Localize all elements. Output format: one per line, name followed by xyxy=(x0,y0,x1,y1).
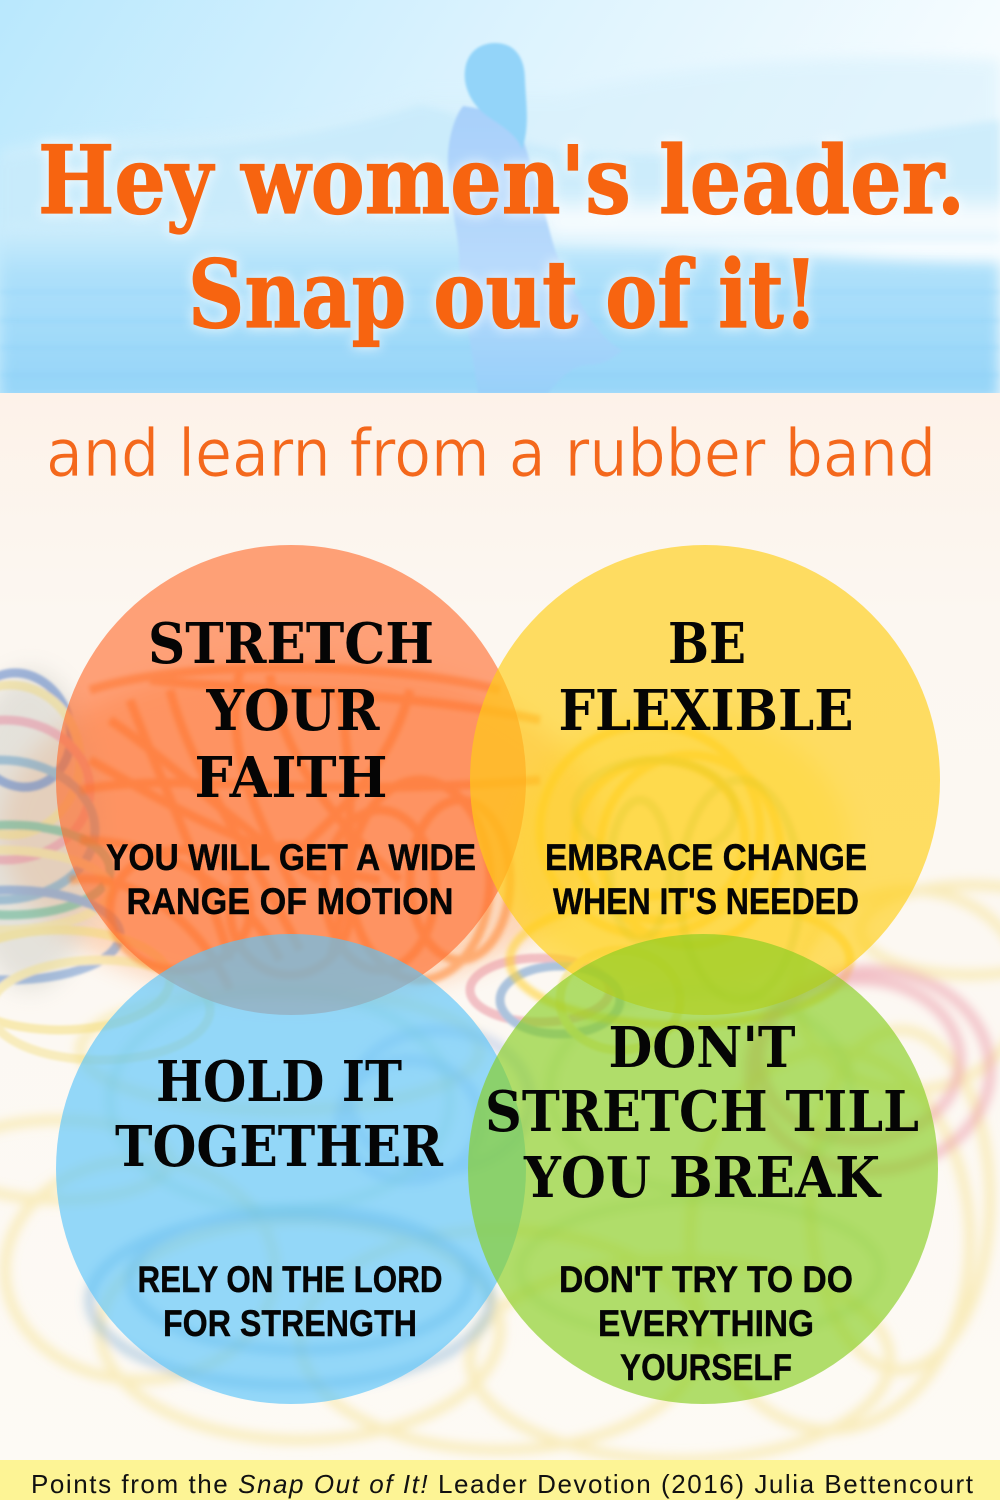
circle: stretch your faith xyxy=(56,545,526,1015)
circle: don't stretch till you break: DON'T xyxy=(608,1015,796,1081)
circle: don't stretch till you break: STRETCH TILL xyxy=(485,1079,919,1145)
subtitle: and learn from a rubber band xyxy=(46,415,936,492)
circle: stretch your faith: FAITH xyxy=(194,745,388,811)
circle: be flexible xyxy=(470,545,940,1015)
band cluster xyxy=(0,658,680,1060)
title: Snap out of it! xyxy=(188,240,818,350)
blurred foreground bands xyxy=(0,885,1000,1460)
yellow cluster xyxy=(510,725,850,1025)
circle: stretch your faith: RANGE OF MOTION xyxy=(126,881,454,922)
circle: don't stretch till you break: YOURSELF xyxy=(620,1347,792,1388)
lower background: rubber band photo xyxy=(0,393,1000,1500)
circle: don't stretch till you break: DON'T TRY TO DO xyxy=(559,1259,853,1300)
orange cluster xyxy=(70,668,540,990)
header photo: woman on misty shore xyxy=(0,0,1000,400)
circle: hold it together: FOR STRENGTH xyxy=(163,1303,417,1344)
circle: be flexible: EMBRACE CHANGE xyxy=(545,837,867,878)
circle: stretch your faith: YOU WILL GET A WIDE xyxy=(106,837,476,878)
circle: be flexible: FLEXIBLE xyxy=(558,678,854,744)
dress xyxy=(448,106,622,393)
circle: hold it together: TOGETHER xyxy=(115,1114,443,1180)
circle: hold it together: RELY ON THE LORD xyxy=(138,1259,442,1300)
title: Snap out of it! xyxy=(188,240,818,350)
title xyxy=(38,126,965,350)
footer credit bar: Points from the Snap Out of It! Leader Devotion (2016) Julia Bettencourt xyxy=(31,1469,974,1499)
hair xyxy=(465,43,527,150)
circle: hold it together xyxy=(56,934,526,1404)
circle: be flexible: BE xyxy=(668,611,746,677)
circle: be flexible: WHEN IT'S NEEDED xyxy=(553,881,859,922)
circle: don't stretch till you break: EVERYTHING xyxy=(598,1303,814,1344)
circle: don't stretch till you break: YOU BREAK xyxy=(523,1145,882,1211)
circle: don't stretch till you break xyxy=(468,934,938,1404)
circle: stretch your faith: STRETCH xyxy=(148,611,434,677)
circle: stretch your faith: YOUR xyxy=(206,678,380,744)
soft tint behind the band pile xyxy=(0,660,600,1000)
circle: hold it together: HOLD IT xyxy=(156,1049,402,1115)
